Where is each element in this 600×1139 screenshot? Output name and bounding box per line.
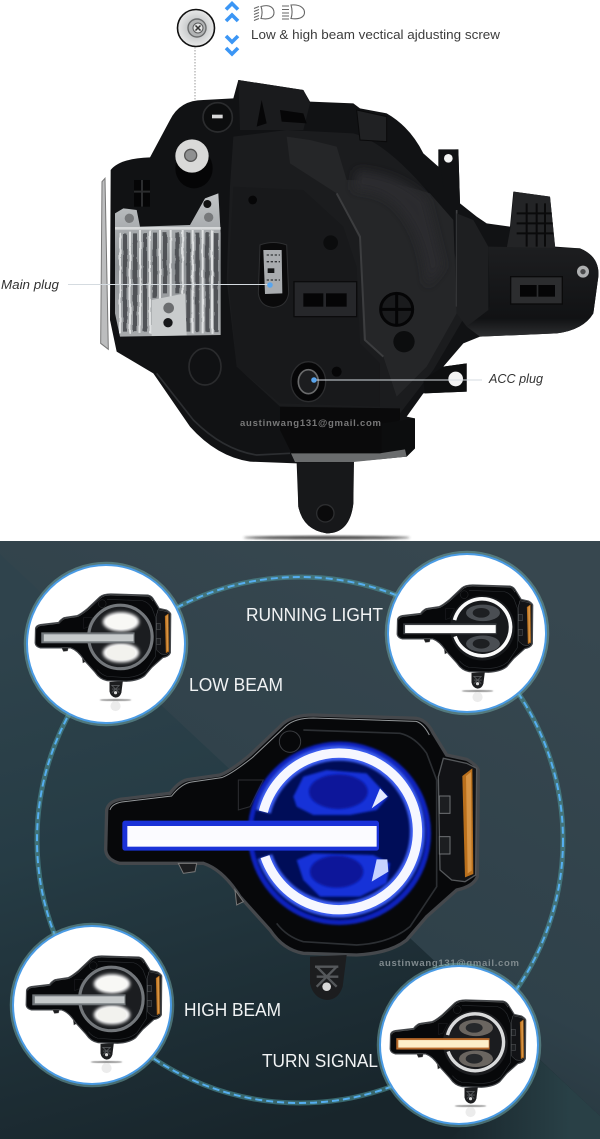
panel: dark lighting modes background	[0, 541, 600, 1139]
mesh tab	[507, 192, 555, 248]
main plug socket	[258, 242, 289, 307]
lens edge	[101, 178, 108, 349]
lower lens	[297, 853, 390, 897]
round crosshair adjuster	[381, 293, 413, 325]
adjusting screw on housing	[175, 139, 213, 188]
bottom tab	[297, 462, 354, 533]
blue halo disc	[250, 744, 429, 923]
arm port	[511, 277, 562, 304]
bottom black block	[280, 407, 400, 453]
dashed orbit ring	[37, 577, 563, 1103]
left square vent	[134, 180, 150, 207]
callout line: main plug	[68, 282, 273, 288]
panel: white rear view background	[0, 0, 600, 541]
housing outline	[110, 80, 598, 533]
ACC socket	[291, 362, 326, 402]
circle: running light	[386, 552, 548, 714]
white ring	[263, 753, 417, 910]
bottom grey lip	[291, 449, 407, 462]
rear view headlight photo	[101, 80, 598, 539]
icon: adjusting screw badge	[178, 10, 214, 46]
label: low beam: LOW BEAM	[189, 675, 283, 695]
arm nut	[577, 266, 589, 278]
lamp: running light on	[397, 585, 533, 702]
label: main plug: Main plug	[1, 278, 59, 292]
callout line: ACC plug	[311, 377, 482, 383]
right lower ear	[423, 363, 467, 393]
mounting ear	[438, 149, 460, 203]
circle: turn signal	[378, 964, 540, 1126]
lamp: low beam on	[35, 594, 171, 711]
label: high beam: HIGH BEAM	[184, 1000, 281, 1020]
lamp: high beam on	[26, 956, 162, 1073]
small hole near ACC	[332, 367, 342, 377]
central blue headlight	[106, 715, 478, 1000]
icon: high beam symbol	[282, 5, 304, 19]
heading: screw caption: Low & high beam vectical ajdusting screw	[251, 27, 501, 42]
centre lower recess	[228, 187, 380, 407]
small hole	[248, 196, 257, 204]
lamp: turn signal on	[390, 1000, 526, 1117]
right arm	[467, 247, 598, 337]
stud	[323, 235, 338, 250]
watermark: upper: austinwang131@gmail.com	[240, 418, 381, 429]
top inner recess	[357, 110, 387, 142]
icon: low beam symbol	[254, 6, 274, 20]
label: turn signal: TURN SIGNAL	[262, 1051, 378, 1071]
curved raised band	[287, 137, 457, 397]
light bar	[122, 821, 379, 851]
rectangular port	[294, 282, 357, 317]
label: running light: RUNNING LIGHT	[246, 605, 383, 625]
watermark: lower: austinwang131@gmail.com	[379, 958, 519, 969]
dotted leader from screw badge to lamp	[194, 47, 196, 152]
lower left socket	[189, 348, 221, 385]
left side lower rim	[157, 373, 290, 455]
round socket top left	[203, 103, 232, 132]
label: ACC plug: ACC plug	[488, 372, 543, 386]
circle: high beam	[12, 924, 172, 1086]
upper lens	[293, 770, 388, 815]
lower round adjuster	[393, 331, 415, 352]
aluminium heat sink	[115, 193, 221, 337]
top connector block	[238, 80, 310, 130]
arm to body ribs	[457, 213, 488, 327]
central housing panel	[227, 130, 467, 413]
circle: low beam	[26, 564, 186, 724]
icon: up and down adjustment arrows	[226, 4, 238, 54]
ground shadow	[243, 536, 410, 539]
